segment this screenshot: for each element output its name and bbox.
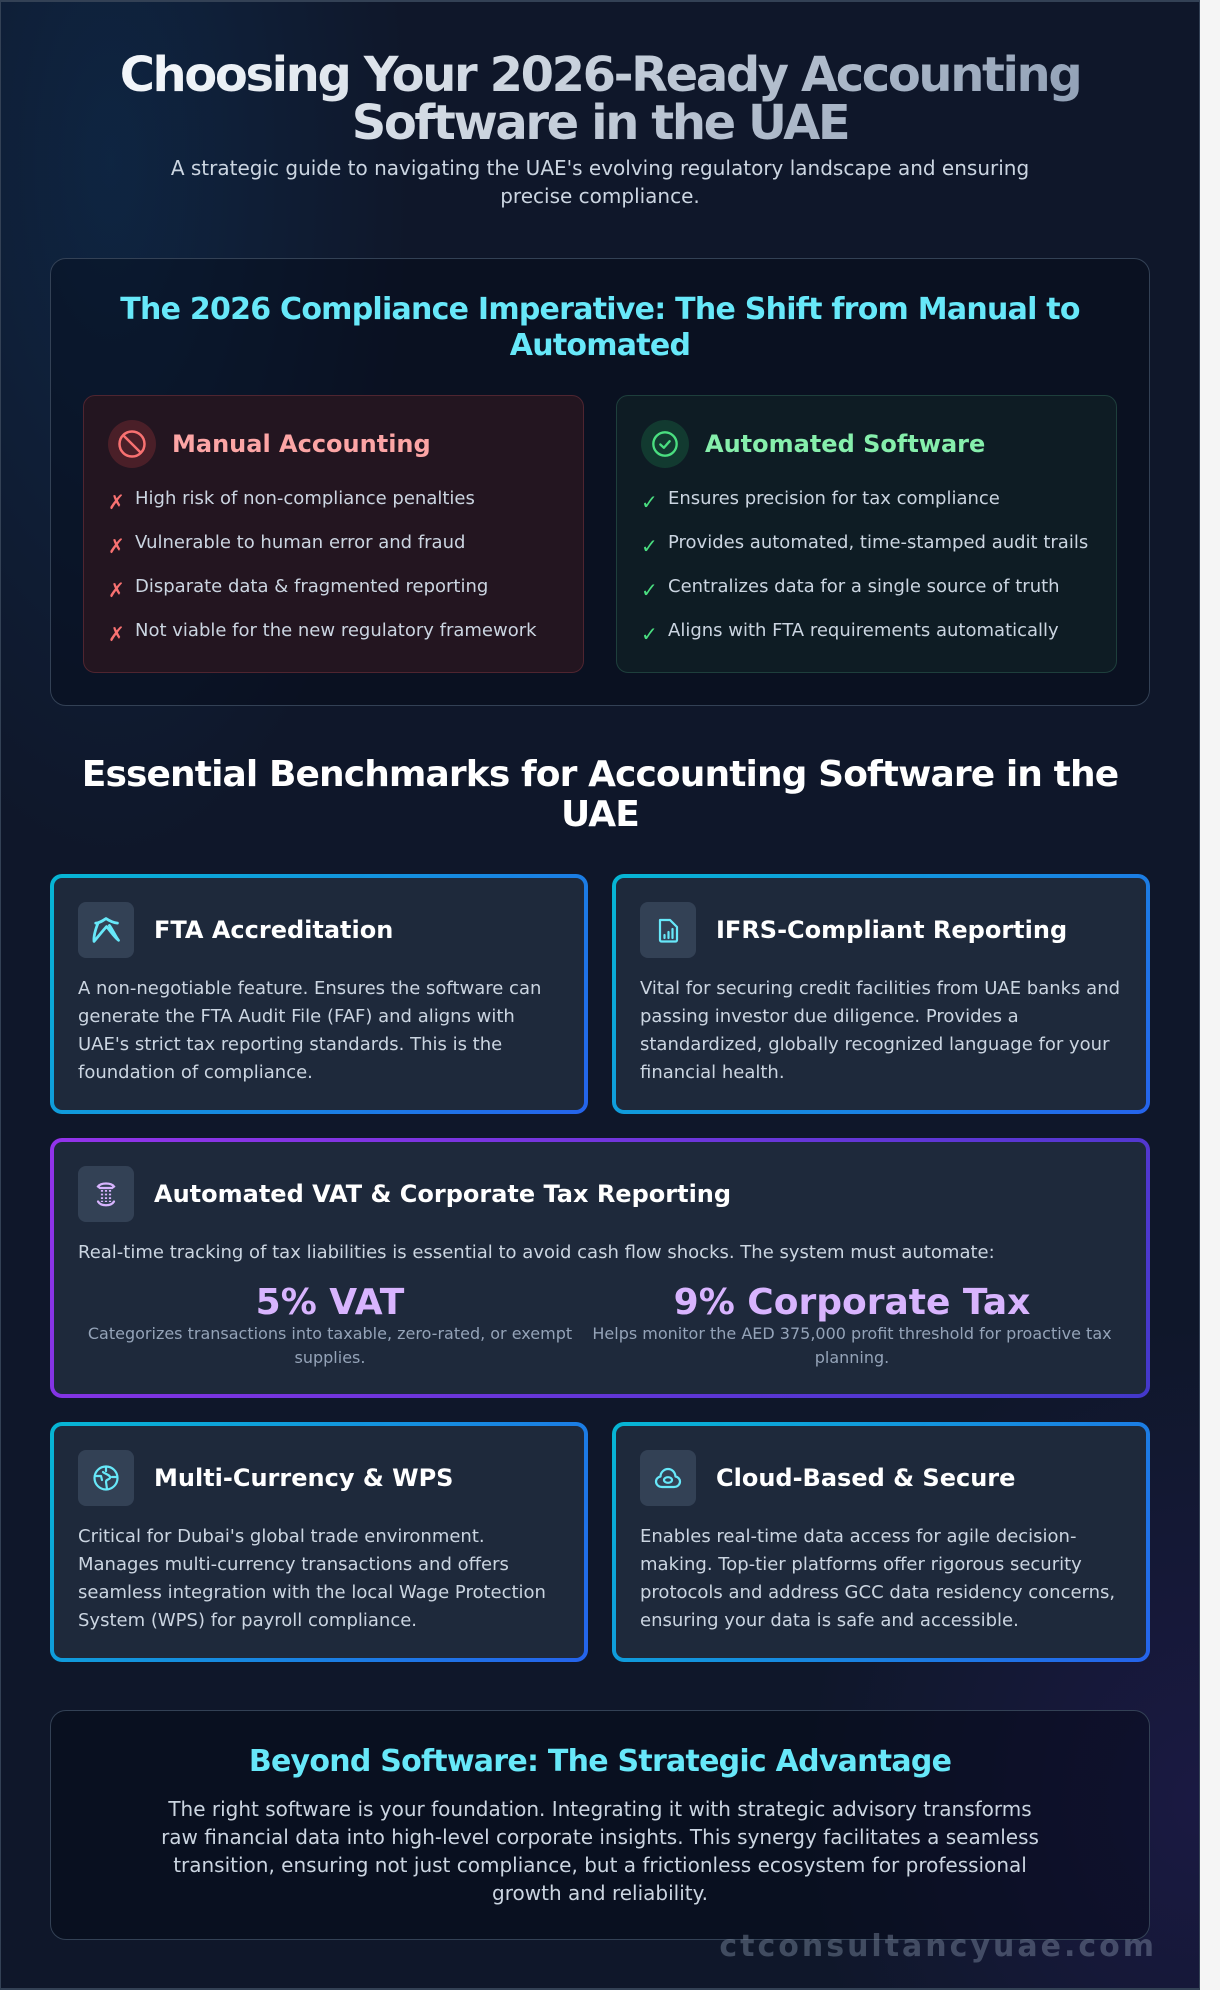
icon: globe [78,1450,134,1506]
card text: Enables real-time data access for agile decision- [640,1526,1076,1547]
card title: Cloud-Based & Secure [716,1464,1015,1492]
automated list: Ensures precision for tax compliance [668,488,1000,509]
closing text [161,1797,1039,1905]
stat: 5% VAT [88,1282,572,1367]
automated list: ✓ [641,578,658,602]
heading: manual accounting: Manual Accounting [172,430,431,458]
manual list [108,488,537,646]
card text [78,978,541,1083]
automated list: ✓ [641,622,658,646]
card text: Manages multi-currency transactions and offers [78,1554,509,1575]
card text [640,978,1120,1083]
card text: making. Top-tier platforms offer rigorous security [640,1554,1082,1575]
stat: 5% VAT: supplies. [295,1348,365,1367]
manual list: High risk of non-compliance penalties [135,488,475,509]
panel: manual accounting [83,395,584,673]
subtitle [171,156,1029,208]
stat: 9% corporate tax: Helps monitor the AED 375,000 profit threshold for proactive tax [592,1324,1112,1343]
subtitle: precise compliance. [500,184,700,208]
card text: Vital for securing credit facilities from UAE banks and [640,978,1120,999]
watermark: ctconsultancyuae.com [719,1929,1157,1964]
card text: UAE's strict tax reporting standards. This is the [78,1034,502,1055]
subtitle: A strategic guide to navigating the UAE's evolving regulatory landscape and ensuring [171,156,1029,180]
card text: standardized, globally recognized language for your [640,1034,1109,1055]
card text: foundation of compliance. [78,1062,313,1083]
manual list: ✗ [108,490,125,514]
stat: 9% corporate tax [592,1282,1112,1367]
stat: 5% VAT: 5% VAT [256,1282,404,1323]
icon: prohibited [108,420,156,468]
automated list: ✓ [641,490,658,514]
closing text: raw financial data into high-level corporate insights. This synergy facilitates a seamless [161,1825,1039,1849]
title [0,51,1200,147]
stat: 5% VAT: Categorizes transactions into taxable, zero-rated, or exempt [88,1324,572,1343]
stat: 9% corporate tax: 9% Corporate Tax [674,1282,1030,1323]
heading: compliance imperative [120,292,1080,363]
card: cloud and security [612,1422,1150,1662]
card text: financial health. [640,1062,785,1083]
automated list: Centralizes data for a single source of truth [668,576,1060,597]
heading: compliance imperative: Automated [510,328,690,363]
card text: Critical for Dubai's global trade environment. [78,1526,485,1547]
card text: Real-time tracking of tax liabilities is essential to avoid cash flow shocks. The system must automate: [78,1242,995,1263]
icon: check circle [641,420,689,468]
icon: calculator [78,1166,134,1222]
card text: A non-negotiable feature. Ensures the software can [78,978,541,999]
title: Choosing Your 2026-Ready Accounting [120,47,1080,103]
icon: document chart [640,902,696,958]
card text: ensuring your data is safe and accessible. [640,1610,1019,1631]
card: IFRS reporting [612,874,1150,1114]
manual list: Disparate data & fragmented reporting [135,576,488,597]
panel: automated software [616,395,1117,673]
card text: System (WPS) for payroll compliance. [78,1610,417,1631]
card: FTA accreditation [50,874,588,1114]
card text: seamless integration with the local Wage Protection [78,1582,546,1603]
manual list: ✗ [108,534,125,558]
heading: essential benchmarks: UAE [561,794,639,835]
manual list: ✗ [108,578,125,602]
automated list [641,488,1088,646]
card text [640,1526,1115,1631]
card text: generate the FTA Audit File (FAF) and aligns with [78,1006,515,1027]
manual list: Not viable for the new regulatory framework [135,620,537,641]
manual list: ✗ [108,622,125,646]
panel: strategic advantage [50,1710,1150,1940]
card title: FTA Accreditation [154,916,393,944]
closing text: growth and reliability. [492,1881,708,1905]
icon: cloud [640,1450,696,1506]
closing text: transition, ensuring not just compliance, but a frictionless ecosystem for professional [173,1853,1027,1877]
card: multi-currency [50,1422,588,1662]
card: VAT and corporate tax [50,1138,1150,1398]
card title: Multi-Currency & WPS [154,1464,453,1492]
card text [78,1526,546,1631]
automated list: Aligns with FTA requirements automatically [668,620,1059,641]
panel: compliance imperative [50,258,1150,706]
heading: compliance imperative: The 2026 Compliance Imperative: The Shift from Manual to [120,292,1080,327]
title: Software in the UAE [352,95,848,151]
stat: 9% corporate tax: planning. [815,1348,889,1367]
heading: strategic advantage: Beyond Software: The Strategic Advantage [249,1744,951,1779]
card title: IFRS-Compliant Reporting [716,916,1067,944]
card text: passing investor due diligence. Provides a [640,1006,1019,1027]
closing text: The right software is your foundation. Integrating it with strategic advisory transforms [168,1797,1032,1821]
automated list: ✓ [641,534,658,558]
card title: Automated VAT & Corporate Tax Reporting [154,1180,731,1208]
card text: protocols and address GCC data residency concerns, [640,1582,1115,1603]
automated list: Provides automated, time-stamped audit trails [668,532,1088,553]
heading: automated software: Automated Software [705,430,985,458]
icon: shield [78,902,134,958]
heading: essential benchmarks [82,754,1118,835]
heading: essential benchmarks: Essential Benchmarks for Accounting Software in the [82,754,1118,795]
manual list: Vulnerable to human error and fraud [135,532,465,553]
